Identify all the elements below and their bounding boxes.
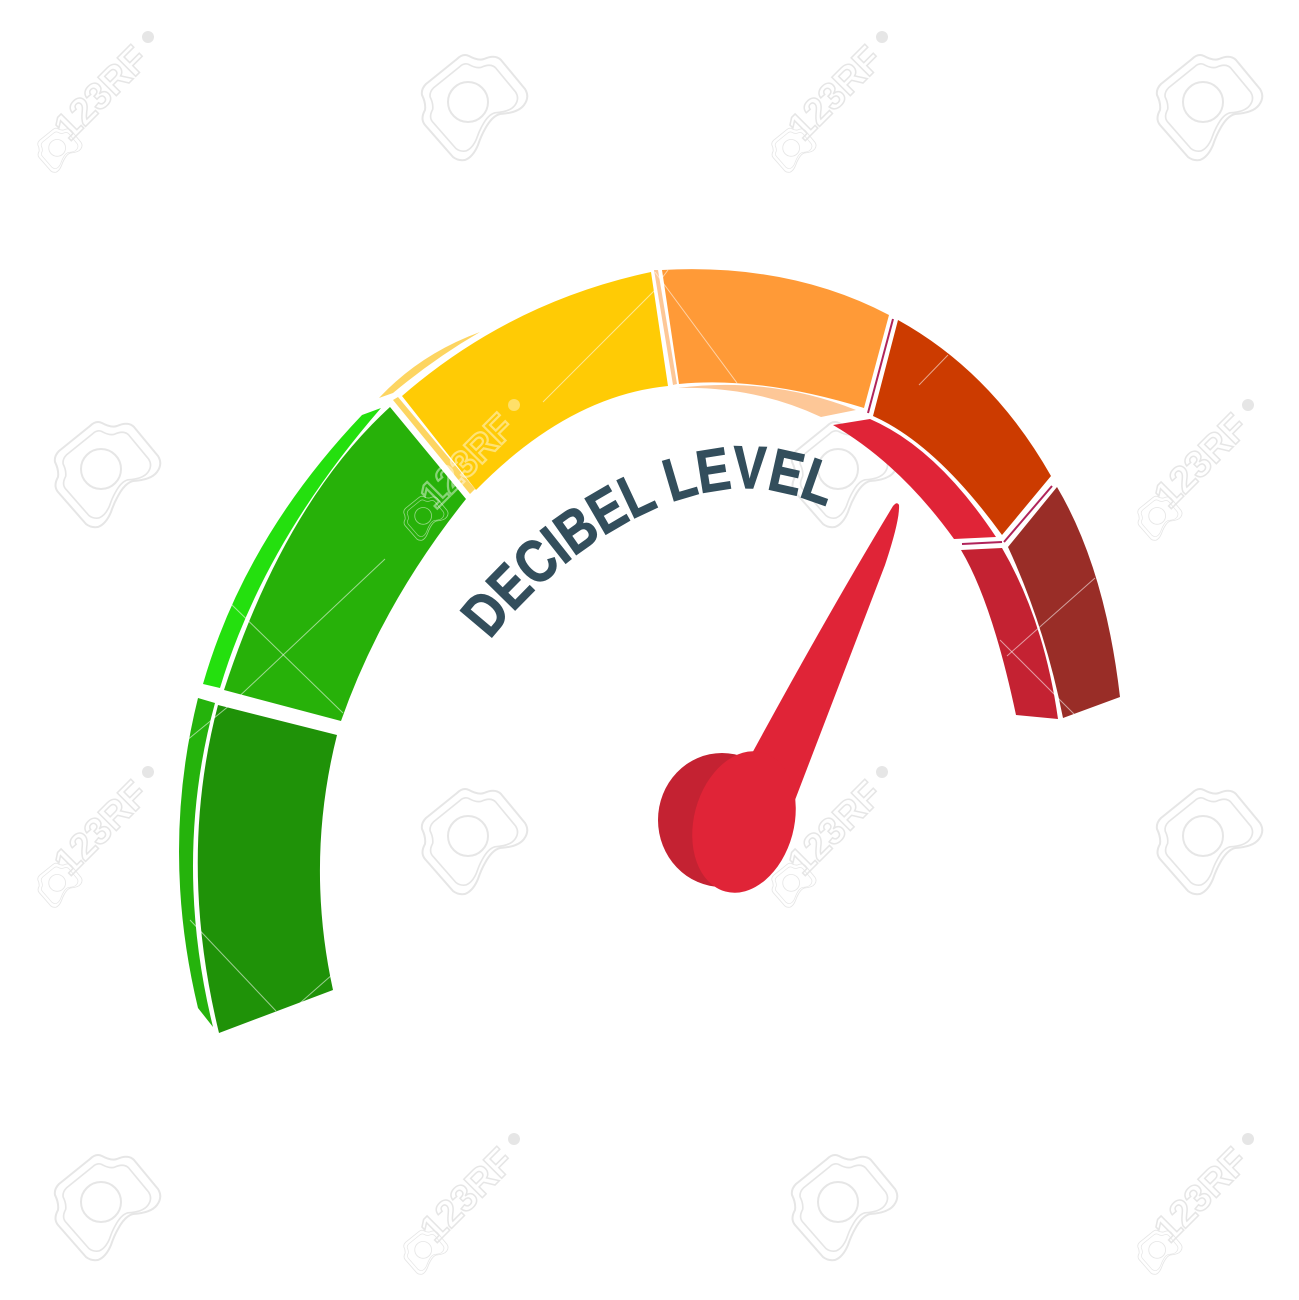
thin construction lines bbox=[186, 270, 1095, 1011]
watermarks: 123RF bbox=[1146, 406, 1257, 517]
segment edge lines bbox=[868, 319, 1052, 544]
title: decibel level: DECIBEL LEVEL bbox=[460, 446, 828, 638]
watermarks: 123RF bbox=[412, 1140, 523, 1251]
watermarks: 123RF bbox=[780, 773, 891, 884]
segment: red-orange bbox=[873, 320, 1051, 535]
hub back bbox=[658, 753, 786, 887]
segment side: dark crimson bbox=[961, 548, 1058, 719]
hub front bbox=[677, 740, 811, 904]
segment: green bbox=[224, 407, 466, 721]
watermarks: 123RF bbox=[46, 773, 157, 884]
segment: orange bbox=[662, 269, 889, 408]
segment: brown bbox=[1008, 487, 1120, 718]
segment side: pale yellow bbox=[379, 332, 480, 494]
segment side: dark green bbox=[179, 698, 215, 1027]
segment: yellow bbox=[402, 272, 668, 490]
segment: dark green bbox=[198, 705, 337, 1033]
segment side: crimson bbox=[833, 419, 996, 539]
needle pointer bbox=[750, 503, 899, 820]
watermark over gauge: 123RF bbox=[412, 406, 523, 517]
segment side: light green bbox=[203, 408, 381, 688]
watermarks: 123RF bbox=[780, 38, 891, 149]
gauge scale bbox=[179, 269, 1120, 1033]
watermarks: 123RF bbox=[46, 38, 157, 149]
segment side: pale orange bbox=[654, 270, 856, 417]
watermarks: 123RF bbox=[1146, 1140, 1257, 1251]
needle bbox=[658, 503, 899, 904]
